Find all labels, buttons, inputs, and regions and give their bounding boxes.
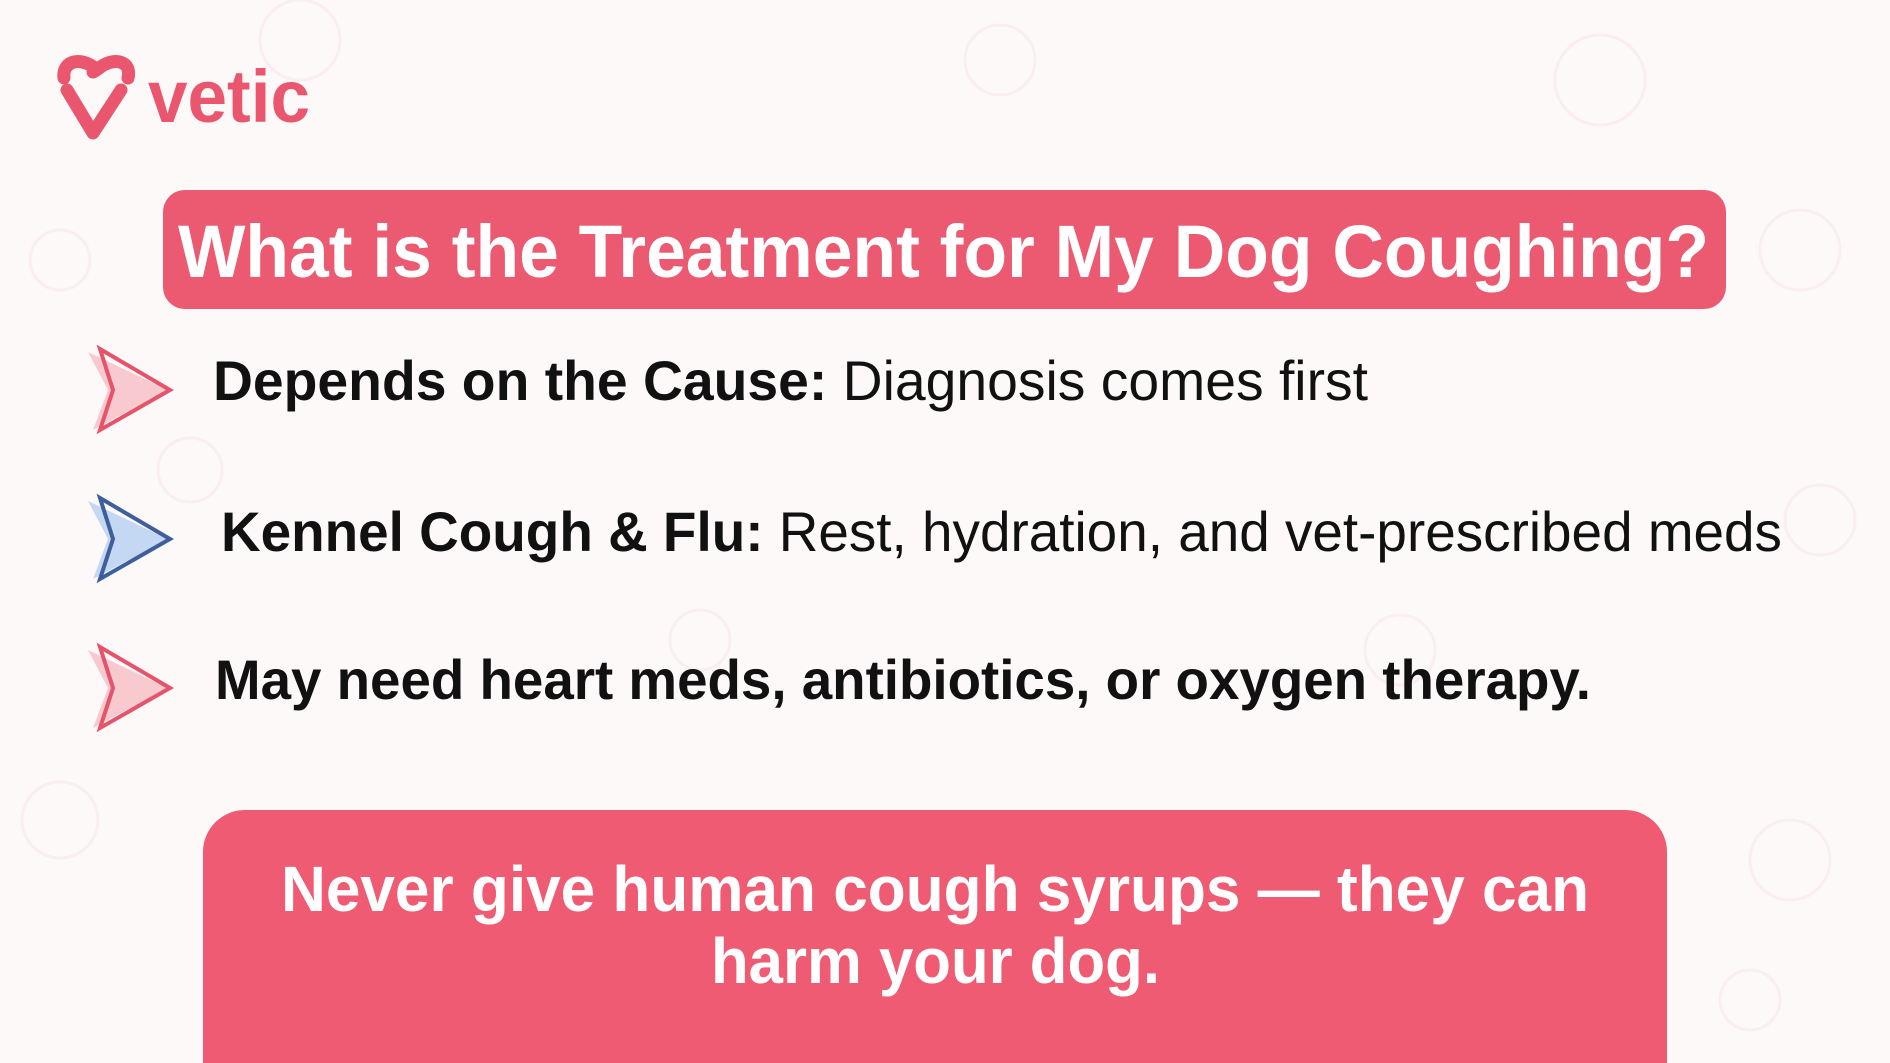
icon: pink arrow (88, 647, 170, 728)
icon: blue arrow (88, 498, 170, 579)
bullet 1: Depends on the Cause: Diagnosis comes first (213, 349, 1368, 412)
icon: pink arrow (88, 349, 170, 430)
callout: warning box: harm your dog. (711, 925, 1160, 997)
callout: warning box: Never give human cough syrups — they can (281, 853, 1589, 925)
title banner (163, 190, 1726, 309)
title banner: What is the Treatment for My Dog Coughing? (178, 210, 1709, 293)
bullet 1 (88, 349, 1368, 430)
logo: vetic (64, 55, 310, 138)
icon: heart V (64, 62, 129, 133)
bullet 2: Kennel Cough & Flu: Rest, hydration, and vet-prescribed meds (221, 500, 1782, 563)
callout: warning box (203, 810, 1667, 1063)
logo text: vetic (148, 55, 310, 138)
bullet 3: May need heart meds, antibiotics, or oxygen therapy. (215, 648, 1591, 711)
